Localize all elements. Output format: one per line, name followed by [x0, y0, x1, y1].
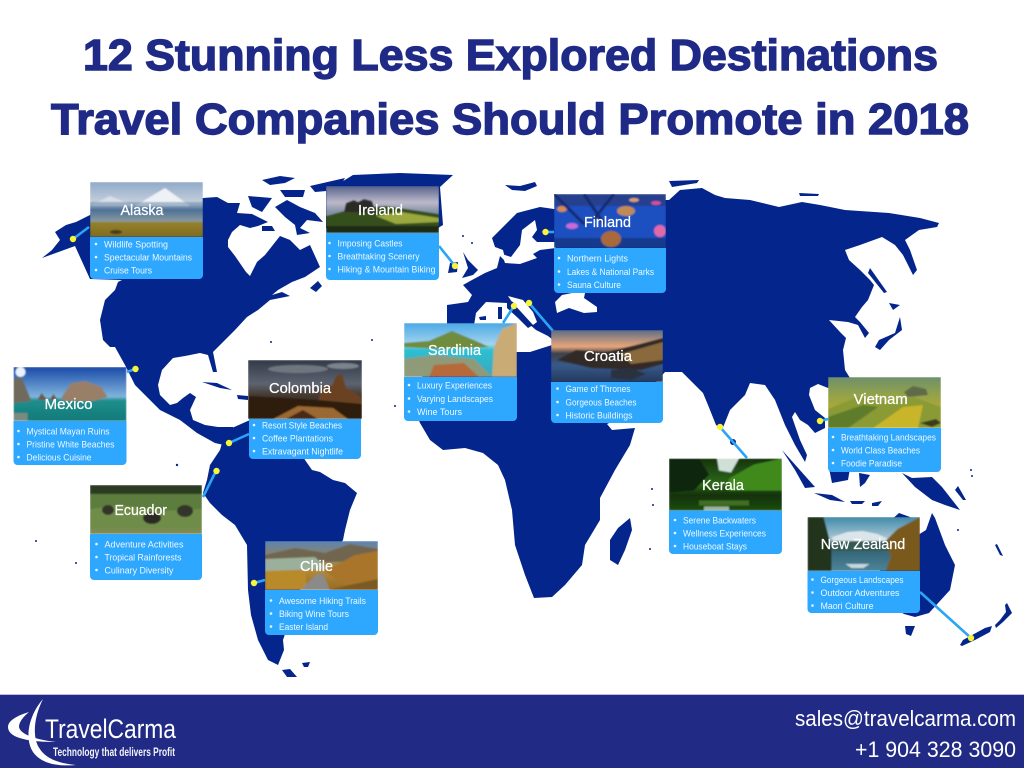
- icon: logo swoosh: [8, 699, 76, 765]
- connector: Chile: [251, 580, 265, 586]
- list: Mexico: Delicious Cuisine: [26, 452, 92, 463]
- list: Croatia: Game of Thrones: [566, 384, 631, 395]
- list: Chile: [270, 596, 366, 633]
- title: [51, 31, 969, 144]
- logo: TravelCarma: [8, 699, 177, 765]
- panel: Chile highlights: [265, 590, 378, 635]
- list: Sardinia: Luxury Experiences: [417, 380, 492, 391]
- list: Sardinia: [408, 380, 493, 418]
- card: Chile: [265, 541, 378, 635]
- card: New Zealand: [808, 517, 920, 613]
- panel: Vietnam highlights: [828, 428, 941, 472]
- card: Sardinia: [404, 323, 517, 421]
- connector: Mexico: [127, 366, 139, 372]
- connector: New Zealand: [920, 592, 974, 641]
- panel: Sardinia highlights: [404, 377, 517, 421]
- list: Finland: Northern Lights: [567, 253, 628, 264]
- photo: Finland: [554, 194, 666, 248]
- list: Ecuador: [95, 539, 184, 576]
- list: New Zealand: Maori Culture: [820, 601, 874, 612]
- list: Colombia: [253, 420, 343, 457]
- list: Chile: Easter Island: [279, 622, 328, 633]
- list: Ireland: Breathtaking Scenery: [338, 251, 420, 262]
- list: Sardinia: Varying Landscapes: [417, 394, 493, 405]
- list: Colombia: Resort Style Beaches: [262, 420, 342, 431]
- list: New Zealand: Gorgeous Landscapes: [820, 575, 904, 586]
- connector: Croatia: [526, 300, 553, 331]
- card: Mexico: [14, 367, 126, 465]
- list: Colombia: Extravagant Nightlife: [262, 446, 343, 457]
- list: Croatia: Gorgeous Beaches: [566, 397, 637, 408]
- panel: Ireland highlights: [326, 233, 439, 280]
- card: Croatia: [551, 330, 663, 423]
- name: Finland: Finland: [584, 215, 631, 231]
- list: Alaska: [95, 239, 192, 276]
- connector: Alaska: [70, 227, 89, 242]
- photo: Sardinia: [404, 323, 517, 377]
- world map: [35, 173, 1012, 677]
- list: Ireland: Imposing Castles: [338, 238, 403, 249]
- name: New Zealand: New Zealand: [821, 537, 905, 553]
- list: Ecuador: Culinary Diversity: [104, 565, 174, 576]
- card: Ecuador: [90, 485, 202, 580]
- name: Vietnam: Vietnam: [854, 392, 908, 408]
- list: Sardinia: Wine Tours: [417, 407, 462, 418]
- photo: Ireland: [326, 186, 439, 233]
- panel: Kerala highlights: [669, 510, 782, 554]
- list: Ecuador: Adventure Activities: [104, 539, 184, 550]
- list: Mexico: [17, 426, 115, 463]
- list: Mexico: Pristine White Beaches: [26, 439, 115, 450]
- connector: Colombia: [226, 434, 249, 446]
- name: Sardinia: Sardinia: [428, 343, 482, 359]
- contact phone: +1 904 328 3090: [855, 737, 1016, 762]
- name: Chile: Chile: [300, 559, 333, 575]
- photo: Chile: [265, 541, 378, 590]
- panel: Mexico highlights: [14, 421, 126, 465]
- card: Colombia: [248, 360, 362, 459]
- name: Ireland: Ireland: [358, 203, 403, 219]
- connector: Vietnam: [817, 418, 828, 424]
- logo wordmark: TravelCarma: [45, 714, 177, 744]
- list: Ireland: Hiking & Mountain Biking: [338, 264, 436, 275]
- list: Vietnam: [832, 432, 936, 469]
- photo: Kerala: [669, 458, 782, 510]
- connector: Ecuador: [203, 468, 220, 497]
- logo tagline: Technology that delivers Profit: [53, 747, 175, 759]
- name: Ecuador: Ecuador: [114, 503, 167, 519]
- card: Vietnam: [828, 377, 941, 472]
- photo: New Zealand: [808, 517, 920, 571]
- list: Finland: [558, 253, 654, 291]
- list: Finland: Lakes & National Parks: [567, 267, 654, 278]
- list: Chile: Awesome Hiking Trails: [279, 596, 366, 607]
- footer band: [0, 694, 1024, 768]
- name: Kerala: Kerala: [702, 478, 745, 494]
- name: Croatia: Croatia: [584, 349, 633, 365]
- photo: Croatia: [551, 330, 663, 382]
- panel: New Zealand highlights: [808, 571, 920, 613]
- photo: Mexico: [14, 367, 126, 421]
- title: 12 Stunning Less Explored Destinations: [83, 31, 938, 80]
- list: Croatia: Historic Buildings: [566, 410, 633, 421]
- card: Alaska: [90, 182, 203, 279]
- list: Kerala: Houseboat Stays: [683, 541, 747, 552]
- list: Mexico: Mystical Mayan Ruins: [26, 426, 110, 437]
- list: Croatia: [556, 384, 637, 421]
- list: New Zealand: Outdoor Adventures: [820, 588, 900, 599]
- list: Alaska: Spectacular Mountains: [104, 252, 192, 263]
- name: Alaska: Alaska: [120, 203, 164, 219]
- connector: Sardinia: [503, 303, 517, 323]
- panel: Colombia highlights: [249, 419, 361, 459]
- list: New Zealand: [811, 575, 904, 612]
- list: Vietnam: Breathtaking Landscapes: [841, 432, 936, 443]
- list: Finland: Sauna Culture: [567, 280, 621, 291]
- list: Alaska: Wildlife Spotting: [104, 239, 168, 250]
- list: Kerala: Serene Backwaters: [683, 515, 756, 526]
- list: Ireland: [328, 238, 436, 275]
- card: Ireland: [326, 186, 439, 280]
- list: Chile: Biking Wine Tours: [279, 609, 349, 620]
- photo: Vietnam: [828, 377, 941, 428]
- photo: Ecuador: [90, 485, 202, 534]
- list: Kerala: Wellness Experiences: [683, 528, 766, 539]
- card: Finland: [554, 194, 666, 293]
- panel: Croatia highlights: [551, 382, 663, 423]
- panel: Ecuador highlights: [90, 534, 202, 580]
- photo: Alaska: [90, 182, 203, 237]
- list: Ecuador: Tropical Rainforests: [104, 552, 182, 563]
- list: Colombia: Coffee Plantations: [262, 433, 333, 444]
- connector: Ireland: [439, 246, 458, 269]
- list: Vietnam: World Class Beaches: [841, 445, 920, 456]
- title: Travel Companies Should Promote in 2018: [51, 95, 969, 144]
- list: Alaska: Cruise Tours: [104, 265, 152, 276]
- name: Mexico: Mexico: [44, 397, 92, 413]
- connector: Finland: [542, 229, 554, 235]
- list: Vietnam: Foodie Paradise: [841, 458, 902, 469]
- name: Colombia: Colombia: [269, 381, 332, 397]
- connector: Kerala: [717, 424, 747, 458]
- list: Kerala: [674, 515, 766, 552]
- panel: Alaska highlights: [90, 237, 203, 279]
- card: Kerala: [669, 458, 782, 554]
- photo: Colombia: [248, 360, 362, 419]
- panel: Finland highlights: [554, 248, 666, 293]
